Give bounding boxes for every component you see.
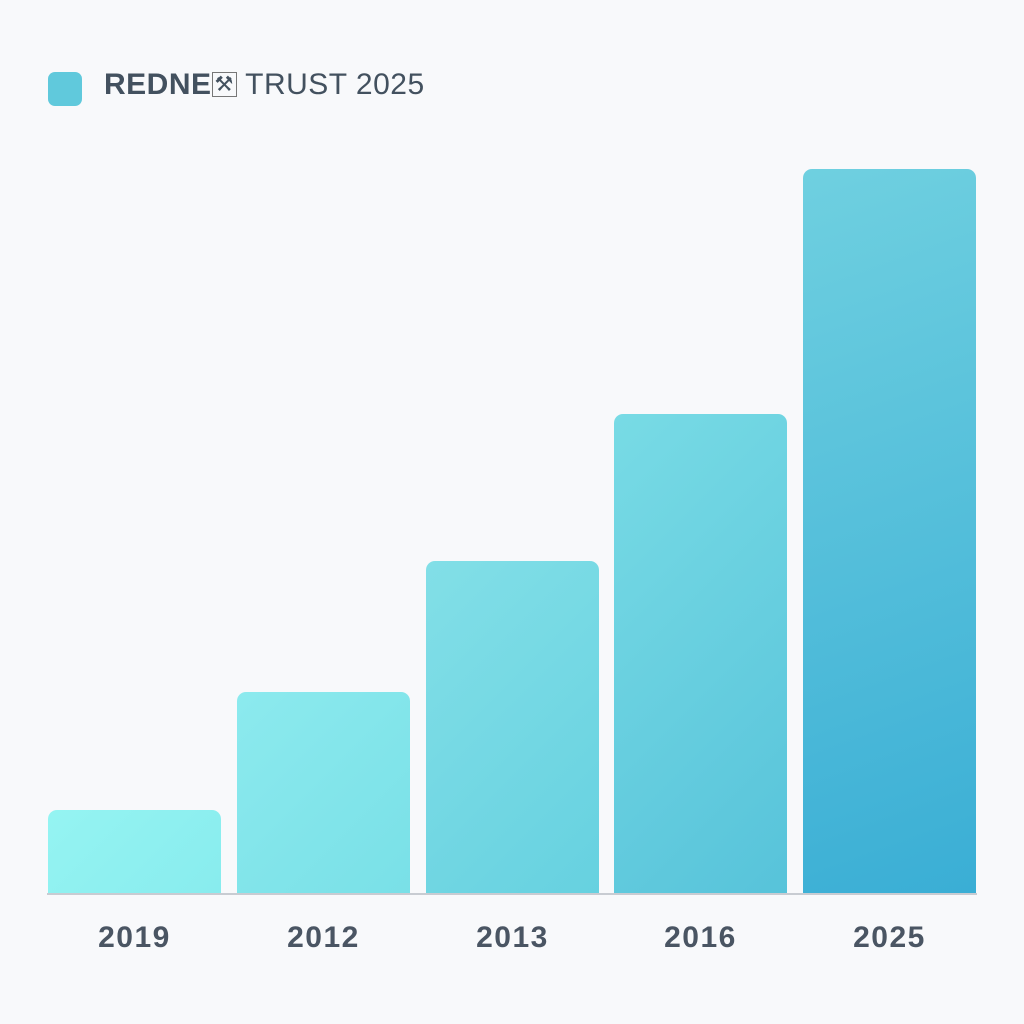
bar 2012 <box>237 692 410 894</box>
title: REDNE⚒ TRUST 2025 <box>104 68 425 101</box>
bar 2013 <box>426 561 599 894</box>
bar 2019 <box>48 810 221 894</box>
bar 2016 <box>614 414 787 894</box>
axis baseline <box>47 893 977 895</box>
label 2019: 2019 <box>98 921 171 954</box>
legend icon <box>48 72 82 106</box>
label 2012: 2012 <box>287 921 360 954</box>
label 2016: 2016 <box>664 921 737 954</box>
label 2025: 2025 <box>853 921 926 954</box>
label 2013: 2013 <box>476 921 549 954</box>
bar 2025 <box>803 169 976 894</box>
